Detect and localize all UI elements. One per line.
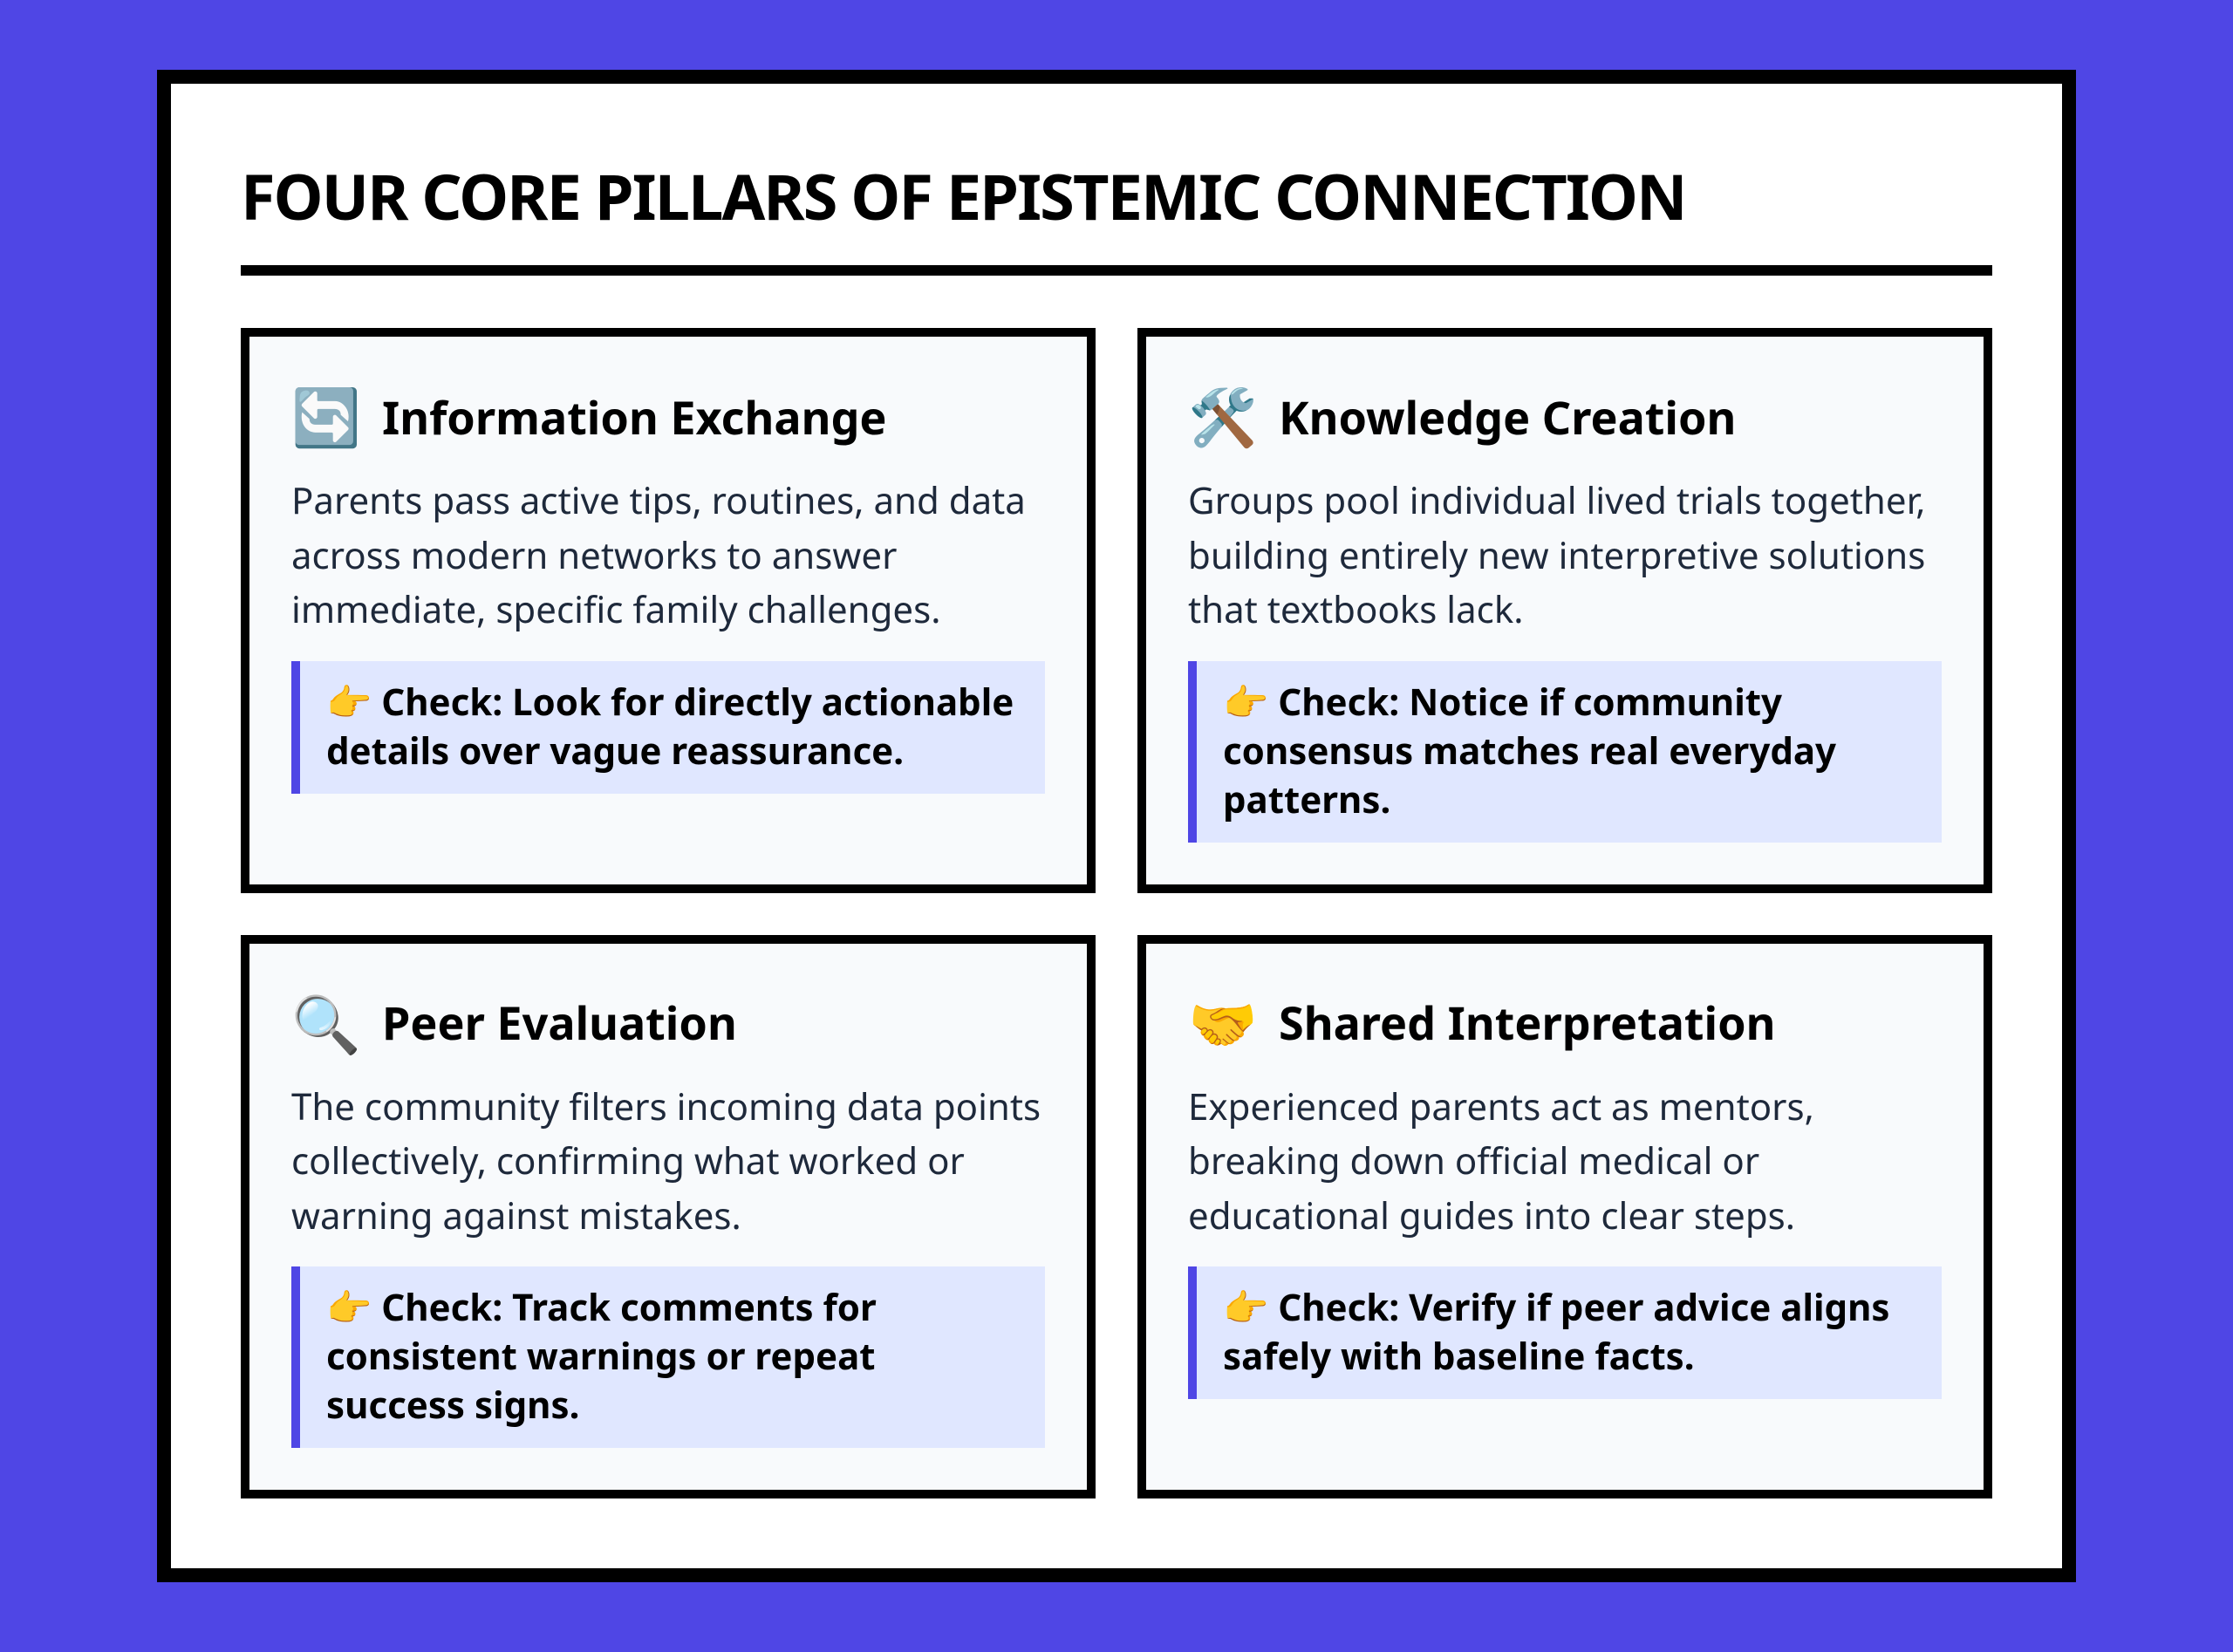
- heading: shared interpretation: [1188, 985, 1776, 1061]
- heading: peer evaluation: 🔍: [291, 985, 361, 1061]
- callout: shared interpretation check: safely with baseline facts.: [1223, 1331, 1695, 1381]
- text: knowledge creation description: [1188, 475, 1925, 634]
- callout: information exchange check: 👉 Check: Look for directly actionable: [326, 677, 1014, 727]
- text: information exchange description: Parents pass active tips, routines, and data: [291, 475, 1026, 525]
- panel: shared interpretation: [1137, 935, 1992, 1498]
- heading: shared interpretation: Shared Interpretation: [1279, 992, 1776, 1054]
- outer frame: [157, 70, 2076, 1582]
- callout: peer evaluation check: [291, 1266, 1045, 1448]
- text: knowledge creation description: Groups pool individual lived trials together,: [1188, 475, 1925, 525]
- callout: information exchange check: [291, 661, 1045, 794]
- text: information exchange description: across modern networks to answer: [291, 530, 897, 580]
- heading: peer evaluation: Peer Evaluation: [382, 992, 737, 1054]
- panel: knowledge creation: [1137, 328, 1992, 893]
- callout: peer evaluation check: success signs.: [326, 1380, 579, 1430]
- heading: knowledge creation: [1188, 378, 1736, 454]
- callout: peer evaluation check: 👉 Check: Track comments for: [326, 1282, 877, 1332]
- text: shared interpretation description: breaking down official medical or: [1188, 1136, 1759, 1185]
- callout: shared interpretation check: 👉 Check: Verify if peer advice aligns: [1223, 1282, 1889, 1332]
- callout: knowledge creation check: patterns.: [1223, 775, 1390, 824]
- heading: information exchange: Information Exchange: [382, 386, 887, 448]
- heading: shared interpretation: 🤝: [1188, 985, 1258, 1061]
- heading: information exchange: [291, 378, 887, 454]
- text: peer evaluation description: warning against mistakes.: [291, 1191, 741, 1240]
- panel: peer evaluation: [241, 935, 1096, 1498]
- title rule: [241, 265, 1992, 276]
- panel: information exchange: [241, 328, 1096, 893]
- text: peer evaluation description: [291, 1082, 1041, 1240]
- text: peer evaluation description: collectively, confirming what worked or: [291, 1136, 965, 1185]
- text: information exchange description: [291, 475, 1026, 634]
- text: knowledge creation description: building entirely new interpretive solutions: [1188, 530, 1925, 580]
- text: peer evaluation description: The community filters incoming data points: [291, 1082, 1041, 1131]
- text: shared interpretation description: Experienced parents act as mentors,: [1188, 1082, 1814, 1131]
- text: information exchange description: immediate, specific family challenges.: [291, 584, 940, 634]
- callout: shared interpretation check: [1188, 1266, 1942, 1399]
- heading: knowledge creation: Knowledge Creation: [1279, 386, 1736, 448]
- callout: knowledge creation check: consensus matches real everyday: [1223, 726, 1836, 775]
- text: knowledge creation description: that textbooks lack.: [1188, 584, 1524, 634]
- callout: information exchange check: details over vague reassurance.: [326, 726, 904, 775]
- callout: knowledge creation check: 👉 Check: Notice if community: [1223, 677, 1782, 727]
- title: FOUR CORE PILLARS OF EPISTEMIC CONNECTION: [241, 154, 1686, 239]
- heading: peer evaluation: [291, 985, 737, 1061]
- heading: information exchange: 🔄: [291, 378, 361, 454]
- callout: knowledge creation check: [1188, 661, 1942, 843]
- text: shared interpretation description: [1188, 1082, 1814, 1240]
- callout: peer evaluation check: consistent warnings or repeat: [326, 1331, 875, 1381]
- heading: knowledge creation: 🛠️: [1188, 378, 1258, 454]
- text: shared interpretation description: educational guides into clear steps.: [1188, 1191, 1795, 1240]
